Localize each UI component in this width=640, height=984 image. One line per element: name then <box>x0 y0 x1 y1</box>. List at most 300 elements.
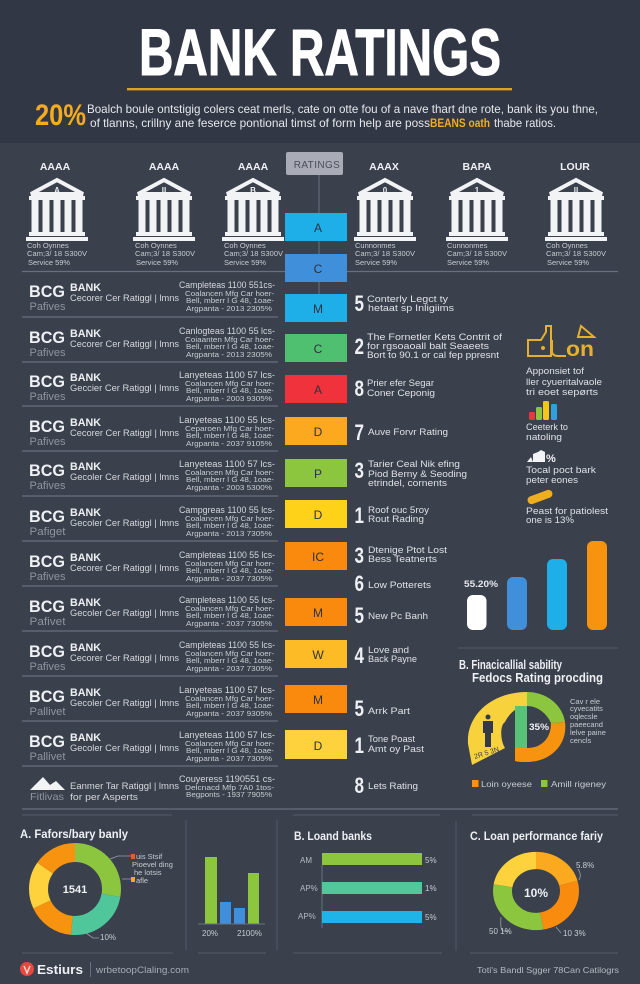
row 4: Argpanta - 2037 9105% <box>186 439 272 448</box>
row 11: Lanyeteas 1100 57 lcs- <box>179 730 275 740</box>
insight text 3 <box>526 465 596 486</box>
item 3: Tarier Ceal Nik efing <box>368 459 460 470</box>
item 5: Arrk Part <box>368 706 410 717</box>
bank 5: 1 <box>475 186 480 195</box>
row 3: Geccier Cer Ratiggl | lmns <box>70 383 179 394</box>
insight text 4 <box>526 506 608 526</box>
row 9: Coalancen Mfg Car hoer- <box>185 649 275 658</box>
callouts: 50 1% <box>489 927 512 936</box>
intro text <box>35 99 598 132</box>
item 1: 1 <box>354 733 364 758</box>
item 8: 8 <box>354 773 364 798</box>
icon: red circle logo <box>20 962 34 976</box>
insight text 1: ller cyueritalvaole <box>526 377 602 388</box>
rating A: A <box>314 221 322 235</box>
row 5: BANK <box>70 461 101 473</box>
row 8: Coalancen Mfg Car hoer- <box>185 604 275 613</box>
item 8: Lets Rating <box>368 781 418 792</box>
row 7: BANK <box>70 552 101 564</box>
item 1 <box>354 503 429 528</box>
last row with mountain icon: Eanmer Tar Ratiggl | lmns <box>70 781 179 792</box>
bar 1: 5% <box>425 856 437 865</box>
item 6 <box>354 571 431 596</box>
bank 3: AAAA <box>238 161 269 173</box>
row 11: Coalancen Mfg Car hoer- <box>185 739 275 748</box>
legend: Loin oyeese <box>481 779 532 789</box>
bar 2: AP% <box>300 884 318 893</box>
row 6: Coalancen Mfg Car hoer- <box>185 514 275 523</box>
title underline <box>127 88 512 90</box>
item 4: 4 <box>354 643 365 668</box>
bank 1: AAAA <box>40 161 71 173</box>
bank 2: II <box>162 186 166 195</box>
gauge notes: Cav r ele <box>570 697 600 706</box>
rating A: A <box>314 383 322 397</box>
row 8: Pafivet <box>30 616 66 628</box>
row 4: Pafives <box>30 436 66 448</box>
heading B: B. Loand banks <box>294 829 372 843</box>
panel: bar chart <box>198 857 265 938</box>
rating C: C <box>314 342 323 356</box>
row 11: BANK <box>70 732 101 744</box>
row 9: Cecorer Cer Ratiggl | lmns <box>70 653 179 664</box>
gauge notes: lelve paine <box>570 728 606 737</box>
row 3: BCG <box>29 372 65 391</box>
rating D <box>285 417 347 445</box>
item 8: 8 <box>354 376 364 401</box>
row 8: Campleteas 1100 55 lcs- <box>179 595 275 605</box>
row 5 <box>29 459 275 492</box>
bank 2: AAAA <box>149 161 180 173</box>
bank 5 <box>446 161 508 267</box>
row 2: Cecorer Cer Ratiggl | lmns <box>70 339 179 350</box>
legend <box>472 779 607 789</box>
row 6: Argpanta - 2013 7305% <box>186 529 272 538</box>
rating D: D <box>314 739 323 753</box>
bank 6: II <box>574 186 578 195</box>
bank 6: Service 59% <box>547 258 589 267</box>
row 2: Canlogteas 1100 55 lcs- <box>179 326 275 336</box>
row 10: Bell, mberr l G 48, 1oae- <box>186 701 275 710</box>
row 7: Bell, mberr l G 48, 1oae- <box>186 566 275 575</box>
row 5: Gecoler Cer Ratiggl | lmns <box>70 472 179 483</box>
panel B: horizontal bars <box>294 829 437 928</box>
item 6: Low Potterets <box>368 580 431 591</box>
icon: person silhouette <box>483 714 493 747</box>
rating W: W <box>312 648 324 662</box>
bank 4: AAAX <box>369 161 399 173</box>
row 8: BANK <box>70 597 101 609</box>
gauge notes: cencls <box>570 736 592 745</box>
heading C: C. Loan performance fariy <box>470 829 603 843</box>
rating D <box>285 500 347 528</box>
row 7: Coalancen Mfg Car hoer- <box>185 559 275 568</box>
item 8: Prier efer Segar <box>367 378 434 389</box>
row 10: BANK <box>70 687 101 699</box>
item 3: Piod Berny & Seoding <box>368 469 467 480</box>
row 7: Campleteas 1100 55 lcs- <box>179 550 275 560</box>
row 1: Pafives <box>30 301 66 313</box>
rating M <box>285 294 347 322</box>
bar 3 <box>298 911 437 923</box>
item 1 <box>354 733 424 758</box>
last row with mountain icon: Begponts - 1937 7905% <box>186 790 272 799</box>
row 10: BCG <box>29 687 65 706</box>
rating C: C <box>314 262 323 276</box>
bank 6 <box>545 161 607 267</box>
gauge donut: 2R 5 3N <box>473 746 500 761</box>
insight text 3: peter eones <box>526 475 578 486</box>
heading: B. Finacicallial sabiIity <box>459 658 562 672</box>
bar 1 <box>300 853 437 865</box>
row 7: Argpanta - 2037 7305% <box>186 574 272 583</box>
panel A: donut: 1541 <box>63 884 87 896</box>
bar 1: AM <box>300 856 312 865</box>
insight text 1: Apponsiet tof <box>526 366 584 377</box>
insight text 4: one is 13% <box>526 515 575 526</box>
rating P <box>285 459 347 487</box>
donut chart C <box>502 861 570 921</box>
row 10: Lanyeteas 1100 57 lcs- <box>179 685 275 695</box>
row 1 <box>29 280 275 313</box>
heading <box>459 658 603 685</box>
row 7: Pafives <box>30 571 66 583</box>
item 3 <box>354 543 447 568</box>
callouts: 5.8% <box>576 861 594 870</box>
icon: rising bars percent <box>527 450 556 465</box>
row 1: Cecorer Cer Ratiggl | lmns <box>70 293 179 304</box>
item 8: Coner Ceponig <box>367 388 435 399</box>
footer: Estiurs <box>37 962 83 977</box>
bank 2 <box>133 161 195 267</box>
row 8 <box>29 595 275 628</box>
bank 4: Cunnonmes <box>355 241 396 250</box>
icon: gold logo <box>528 326 594 361</box>
row 10: Argpanta - 2037 9305% <box>186 709 272 718</box>
donut chart A <box>38 852 112 926</box>
heading A: A. Fafors/bary banly <box>20 827 128 841</box>
row 11 <box>29 730 275 763</box>
callouts: he lotsis <box>134 868 162 877</box>
rating D: D <box>314 425 323 439</box>
row 5: Coalancen Mfg Car hoer- <box>185 468 275 477</box>
insight text 4: Peast for patiolest <box>526 506 608 517</box>
row 7: Cecorer Cer Ratiggl | lmns <box>70 563 179 574</box>
row 2: Argpanta - 2013 2305% <box>186 350 272 359</box>
row 1: Campleteas 1100 551cs- <box>179 280 275 290</box>
item 4: Back Payne <box>368 654 417 665</box>
bar 2 <box>300 882 437 894</box>
header band <box>0 0 640 143</box>
item 3: 3 <box>354 543 364 568</box>
item 5: New Pc Banh <box>368 611 428 622</box>
bank 6: Cam;3/ 18 S300V <box>546 249 606 258</box>
bank 3: Cam;3/ 18 S300V <box>224 249 283 258</box>
row 1: Argpanta - 2013 2305% <box>186 304 272 313</box>
row 10 <box>29 685 275 718</box>
row 4: Lanyeteas 1100 55 lcs- <box>179 415 275 425</box>
row 5: BCG <box>29 461 65 480</box>
rating P: P <box>314 467 322 481</box>
item 5 <box>354 291 454 316</box>
callouts: 10 3% <box>563 929 586 938</box>
panel A: donut <box>20 827 173 942</box>
item 5 <box>354 696 410 721</box>
rating A <box>285 213 347 241</box>
item 5: 5 <box>354 603 364 628</box>
rating C <box>285 334 347 362</box>
item 3: etrindel, cornents <box>368 478 447 489</box>
row 3: Pafives <box>30 391 66 403</box>
row 6: Pafiget <box>30 526 66 538</box>
insight text 2 <box>526 422 568 443</box>
last row with mountain icon: for per Asperts <box>70 792 138 803</box>
item 5: Conterly Legct ty <box>367 294 448 305</box>
footer <box>20 962 619 977</box>
callouts: Pioevel ding <box>132 860 173 869</box>
insight text 1 <box>526 366 602 398</box>
rating M: M <box>313 302 323 316</box>
row 8: Argpanta - 2037 7305% <box>186 619 272 628</box>
bank 3: Coh Oynnes <box>224 241 266 250</box>
row 1: Bell, mberr l G 48, 1oae- <box>186 296 275 305</box>
bank 3 <box>222 161 284 267</box>
row 2: Coiaanten Mfg Car hoer- <box>185 335 275 344</box>
bank 5: Cunnonmes <box>447 241 488 250</box>
item 3: Dtenige Ptot Lost <box>368 545 447 556</box>
bank 3: Service 59% <box>224 258 266 267</box>
heading: Fedocs Rating procding <box>472 671 603 685</box>
gauge notes: paeecand <box>570 720 603 729</box>
rating C <box>285 254 347 282</box>
callouts: afle <box>136 876 148 885</box>
bank 5: Service 59% <box>447 258 489 267</box>
item 7: Auve Forvr Rating <box>368 427 448 438</box>
item 3 <box>354 458 467 489</box>
bank 6: Coh Oynnes <box>546 241 588 250</box>
row 9: BCG <box>29 642 65 661</box>
row 4: Bell, mberr l G 48, 1oae- <box>186 431 275 440</box>
item 4 <box>354 643 417 668</box>
panel C: donut <box>470 829 603 938</box>
row 2: BCG <box>29 328 65 347</box>
row 3: Bell, mberr l G 48, 1oae- <box>186 386 275 395</box>
row 8: BCG <box>29 597 65 616</box>
row 10: Coalancen Mfg Car hoer- <box>185 694 275 703</box>
bank 1: Cam;3/ 18 S300V <box>27 249 87 258</box>
intro text: BEANS oath <box>430 116 490 130</box>
icon: gold logo: on <box>566 338 594 361</box>
row 3: Argpanta - 2003 9305% <box>186 394 272 403</box>
insight text 2: natoling <box>526 432 562 443</box>
bank 4 <box>354 161 416 267</box>
row 5: Argpanta - 2003 5300% <box>186 483 272 492</box>
legend: Amill rigeney <box>551 779 607 789</box>
row 7: BCG <box>29 552 65 571</box>
bank 4: Service 59% <box>355 258 397 267</box>
item 3: Bess Teatnerts <box>368 554 437 565</box>
item 8 <box>354 376 435 401</box>
row 6: BANK <box>70 507 101 519</box>
item 5: 5 <box>354 696 364 721</box>
insight text 3: Tocal poct bark <box>526 465 596 476</box>
panel: bar chart: 2100% <box>237 929 262 938</box>
row 9: BANK <box>70 642 101 654</box>
row 4 <box>29 415 275 448</box>
rating M <box>285 598 347 626</box>
callouts: 10% <box>100 933 116 942</box>
gauge notes <box>570 697 606 745</box>
item 8 <box>354 773 418 798</box>
row 1: BCG <box>29 282 65 301</box>
last row with mountain icon: Delcnacd Mfp 7A0 1tos- <box>185 783 275 792</box>
row 1: BANK <box>70 282 101 294</box>
row 3: Coalancen Mfg Car hoer- <box>185 379 275 388</box>
row 5: Bell, mberr l G 48, 1oae- <box>186 475 275 484</box>
item 2 <box>354 332 502 361</box>
item 7: 7 <box>354 420 364 445</box>
callouts <box>489 861 594 938</box>
row 3: BANK <box>70 372 101 384</box>
row 6: Campgreas 1100 55 lcs- <box>179 505 275 515</box>
rating W <box>285 640 347 668</box>
icon: rising bars percent: % <box>546 453 556 465</box>
bar 3: 5% <box>425 913 437 922</box>
bank 1 <box>26 161 88 267</box>
bank 5: BAPA <box>463 161 492 173</box>
title: BANK RATINGS <box>139 15 501 89</box>
row 5: Lanyeteas 1100 57 lcs- <box>179 459 275 469</box>
row 9: Pafives <box>30 661 66 673</box>
bank 2: Cam;3/ 18 S300V <box>135 249 195 258</box>
bar chart: rounded columns: 55.20% <box>464 579 499 590</box>
row 11: BCG <box>29 732 65 751</box>
item 7 <box>354 420 448 445</box>
item 5 <box>354 603 428 628</box>
gauge donut: 35% <box>529 722 550 733</box>
ratings tag: RATINGS <box>294 160 340 171</box>
icon: gold pill <box>526 489 554 505</box>
footer: wrbetoopClaling.com <box>95 965 189 975</box>
row 11: Argpanta - 2037 7305% <box>186 754 272 763</box>
intro text: Boalch boule ontstigig colers ceat merls, cate on otte fou of a nave thart dne rote, bank its you thne, <box>87 102 598 116</box>
bank 6: LOUR <box>560 161 590 173</box>
panel: financial stability <box>459 658 607 789</box>
bank 2: Coh Oynnes <box>135 241 177 250</box>
bank 3: B <box>250 186 256 195</box>
item 1: Rout Rading <box>368 514 424 525</box>
bank icon row <box>26 161 607 267</box>
row 1: Coalancen Mfg Car hoer- <box>185 289 275 298</box>
row 9 <box>29 640 275 673</box>
panel: bar chart: 20% <box>202 929 218 938</box>
item 1: 1 <box>354 503 364 528</box>
bank 1: Coh Oynnes <box>27 241 69 250</box>
item 1: Tone Poast <box>368 734 415 745</box>
item 5: hetaat sp Inligiims <box>368 303 454 314</box>
row 11: Pallivet <box>30 751 66 763</box>
numbered list <box>354 291 502 798</box>
last row with mountain icon: Fitlivas <box>30 791 64 803</box>
bank 4: Cam;3/ 18 S300V <box>355 249 415 258</box>
item 2: for rgsoaoall balt Seaeets <box>367 341 489 352</box>
bar 3: AP% <box>298 912 316 921</box>
row 11: Gecoler Cer Ratiggl | lmns <box>70 743 179 754</box>
item 2: 2 <box>354 334 364 359</box>
rating M <box>285 685 347 713</box>
row 6 <box>29 505 275 538</box>
rating A <box>285 375 347 403</box>
intro text: 20% <box>35 99 86 132</box>
icon: mini bars <box>529 401 557 420</box>
rating M: M <box>313 693 323 707</box>
bank rows list <box>22 280 278 803</box>
row 2: BANK <box>70 328 101 340</box>
panel C: donut: 10% <box>524 886 548 900</box>
row 5: Pafives <box>30 480 66 492</box>
item 4: Love and <box>368 645 409 656</box>
row 11: Bell, mberr l G 48, 1oae- <box>186 746 275 755</box>
bank 4: 0 <box>383 186 388 195</box>
row 4: Cecorer Cer Ratiggl | lmns <box>70 428 179 439</box>
rating D: D <box>314 508 323 522</box>
bank 2: Service 59% <box>136 258 178 267</box>
row 10: Gecoler Cer Ratiggl | lmns <box>70 698 179 709</box>
gauge donut <box>468 692 565 765</box>
last row with mountain icon: Couyeress 1190551 cs- <box>179 774 275 784</box>
insight text 1: tri eoet sepørts <box>526 387 598 398</box>
side insights <box>526 326 608 526</box>
row 9: Argpanta - 2037 7305% <box>186 664 272 673</box>
item 5: 5 <box>354 291 364 316</box>
row 4: BANK <box>70 417 101 429</box>
row 3 <box>29 370 275 403</box>
item 1: Amt oy Past <box>368 744 424 755</box>
ratings tag <box>286 152 343 175</box>
row 9: Bell, mberr l G 48, 1oae- <box>186 656 275 665</box>
item 6: 6 <box>354 571 364 596</box>
row 8: Bell, mberr l G 48, 1oae- <box>186 611 275 620</box>
row 10: Pallivet <box>30 706 66 718</box>
row 7 <box>29 550 275 583</box>
insight text 2: Ceeterk to <box>526 422 568 433</box>
rating colour scale <box>285 213 347 759</box>
row 2: Bell, mberr l G 48, 1oae- <box>186 342 275 351</box>
last row with mountain icon <box>30 774 275 803</box>
item 1: Roof ouc 5roy <box>368 505 429 516</box>
intro text: thabe ratios. <box>494 116 556 130</box>
gauge notes: cyvecatits <box>570 704 603 713</box>
bar chart: rounded columns <box>464 541 607 630</box>
bank 5: Cam;3/ 18 S300V <box>447 249 507 258</box>
rating IC <box>285 542 347 570</box>
gauge notes: oqlecsle <box>570 712 598 721</box>
row 4: Ceparoen Mfg Car hoer- <box>185 424 275 433</box>
row 6: BCG <box>29 507 65 526</box>
row 9: Campleteas 1100 55 lcs- <box>179 640 275 650</box>
row 4: BCG <box>29 417 65 436</box>
callouts: uis Stsif <box>136 852 163 861</box>
callouts <box>86 852 173 942</box>
row 8: Gecoler Cer Ratiggl | lmns <box>70 608 179 619</box>
row 6: Bell, mberr l G 48, 1oae- <box>186 521 275 530</box>
row 2 <box>29 326 275 359</box>
row 3: Lanyeteas 1100 57 lcs- <box>179 370 275 380</box>
rating D <box>285 730 347 759</box>
bank 1: Service 59% <box>28 258 70 267</box>
item 2: Bort to 90.1 or cal fep ppresnt <box>367 350 499 361</box>
row 2: Pafives <box>30 347 66 359</box>
